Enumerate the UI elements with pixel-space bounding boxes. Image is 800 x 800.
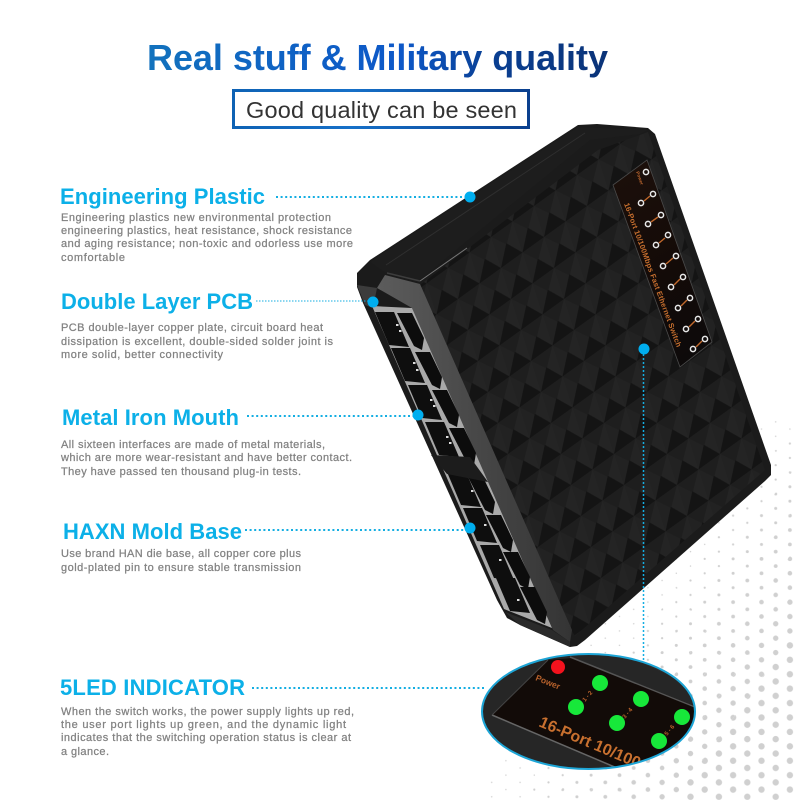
description: more solid, better connectivity bbox=[61, 349, 224, 361]
callout: double layer PCB bbox=[61, 289, 378, 361]
bottom lip bbox=[505, 612, 570, 647]
description bbox=[61, 322, 334, 361]
marker bbox=[412, 410, 424, 420]
subtitle box bbox=[234, 90, 528, 128]
callout: 5LED indicator bbox=[60, 675, 486, 758]
heading: Metal Iron Mouth bbox=[62, 405, 239, 430]
marker bbox=[368, 296, 378, 308]
heading: Engineering Plastic bbox=[60, 184, 265, 209]
description: the user port lights up green, and the dynamic light bbox=[61, 719, 346, 731]
leader line bbox=[256, 300, 370, 302]
port panel bbox=[372, 306, 552, 628]
port number labels: 5 - 6 bbox=[664, 724, 677, 737]
description: Engineering plastics new environmental protection bbox=[61, 212, 331, 224]
model text: 16-Port 10/100Mbps Fast Ethernet Switch bbox=[622, 202, 684, 349]
marker bbox=[464, 192, 476, 202]
description: They have passed ten thousand plug-in tests. bbox=[61, 466, 301, 478]
port number labels: 3 - 4 bbox=[622, 707, 635, 720]
subtitle box: Good quality can be seen bbox=[246, 97, 517, 123]
title: Real stuff & Military quality bbox=[147, 37, 608, 78]
LED marker with vertical leader bbox=[638, 344, 650, 662]
description: and aging resistance; non-toxic and odorless use more bbox=[61, 238, 353, 250]
description bbox=[61, 706, 354, 758]
description bbox=[61, 212, 353, 264]
description: engineering plastics, heat resistance, shock resistance bbox=[61, 225, 352, 237]
callout: metal iron mouth bbox=[60, 405, 424, 478]
leader line bbox=[247, 415, 414, 417]
enlarged model text: 16-Port 10/100 bbox=[536, 714, 643, 772]
switch body bbox=[357, 124, 771, 647]
green LEDs bbox=[568, 675, 690, 749]
leader line bbox=[245, 529, 466, 531]
LED connectors bbox=[644, 196, 702, 347]
heading: HAXN Mold Base bbox=[63, 519, 242, 544]
port number labels bbox=[582, 690, 677, 737]
ethernet ports bbox=[375, 312, 547, 624]
background halftone dots bbox=[474, 420, 800, 800]
leader line bbox=[252, 687, 486, 689]
power label: Power bbox=[534, 673, 562, 692]
LED label panel bbox=[613, 160, 712, 367]
description: All sixteen interfaces are made of metal materials, bbox=[61, 439, 325, 451]
power label: Power bbox=[635, 171, 645, 186]
marker bbox=[464, 522, 476, 534]
LED magnifier inset bbox=[481, 653, 696, 770]
enlarged label panel bbox=[493, 658, 694, 766]
description: PCB double-layer copper plate, circuit board heat bbox=[61, 322, 323, 334]
diamond textured top face bbox=[420, 132, 765, 636]
port status lights bbox=[396, 324, 520, 601]
description bbox=[60, 439, 352, 478]
LED rings bbox=[638, 169, 708, 352]
description bbox=[61, 548, 302, 574]
description: dissipation is excellent, double-sided solder joint is bbox=[61, 336, 334, 348]
top rim bbox=[370, 127, 648, 280]
port number labels: 1 - 2 bbox=[582, 690, 595, 703]
callout: engineering plastic bbox=[60, 184, 476, 264]
description: comfortable bbox=[61, 252, 125, 264]
heading: Double Layer PCB bbox=[61, 289, 253, 314]
side rim bbox=[377, 275, 572, 642]
description: a glance. bbox=[61, 746, 109, 758]
description: indicates that the switching operation status is clear at bbox=[61, 732, 351, 744]
description: Use brand HAN die base, all copper core plus bbox=[61, 548, 302, 560]
description: which are more wear-resistant and have better contact. bbox=[60, 452, 352, 464]
description: When the switch works, the power supply lights up red, bbox=[61, 706, 354, 718]
power LED bbox=[551, 660, 565, 674]
product: network switch bbox=[357, 124, 771, 647]
description: gold-plated pin to ensure stable transmission bbox=[61, 562, 301, 574]
heading: 5LED INDICATOR bbox=[60, 675, 245, 700]
callout: HAXN mold base bbox=[61, 519, 476, 574]
leader line bbox=[276, 196, 466, 198]
